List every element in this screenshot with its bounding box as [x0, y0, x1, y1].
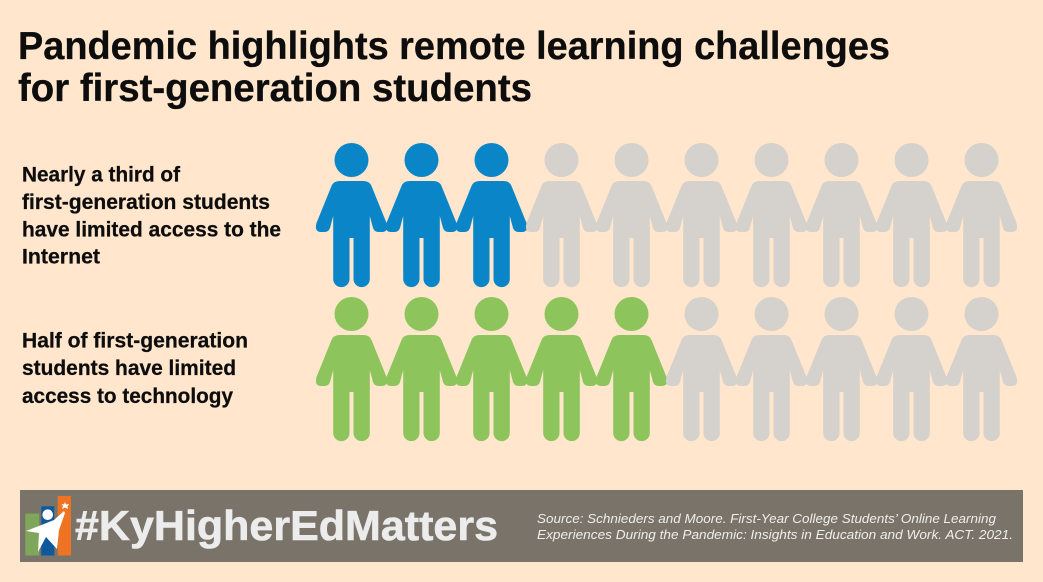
text block: technology access: Half of first-generation	[22, 330, 248, 352]
text block: internet access: Nearly a third of	[22, 164, 181, 186]
footer banner	[20, 490, 1023, 562]
text block: internet access	[22, 164, 281, 268]
text block: internet access: first-generation students	[22, 191, 270, 214]
title	[18, 25, 890, 110]
text block: technology access: students have limited	[22, 357, 236, 380]
pictogram row: internet, 3 of 10 highlighted	[316, 143, 1017, 287]
pictogram row: technology, 5 of 10 highlighted	[316, 297, 1017, 441]
source note: Experiences During the Pandemic: Insights in Education and Work. ACT. 2021.	[537, 527, 1013, 542]
text block: internet access: Internet	[22, 246, 100, 268]
source note	[537, 511, 1013, 542]
title: Pandemic highlights remote learning challenges	[18, 25, 890, 68]
text block: technology access	[22, 330, 248, 408]
text block: internet access: have limited access to the	[22, 218, 281, 242]
hashtag: #KyHigherEdMatters	[75, 502, 498, 549]
text block: technology access: access to technology	[22, 385, 233, 408]
source note: Source: Schnieders and Moore. First-Year College Students’ Online Learning	[537, 511, 997, 526]
icon: logo	[25, 496, 71, 556]
title: for first-generation students	[18, 67, 532, 110]
